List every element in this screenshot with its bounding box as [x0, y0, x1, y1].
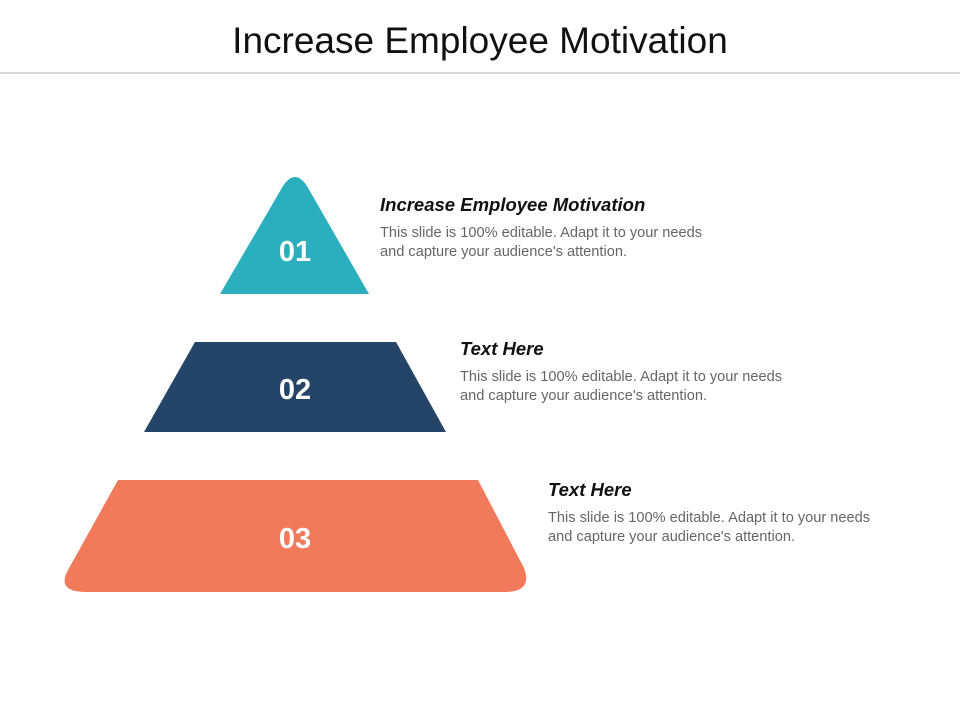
text block 1 — [380, 194, 702, 260]
text block 2: Text Here — [460, 338, 544, 359]
tier 3 trapezoid: 03 — [279, 523, 311, 555]
tier 1 triangle — [220, 177, 369, 294]
text block 3: Text Here — [548, 479, 632, 500]
text block 1: and capture your audience's attention. — [380, 244, 627, 260]
text block 3: and capture your audience's attention. — [548, 528, 795, 544]
text block 2 — [460, 338, 782, 404]
tier 2 trapezoid — [144, 342, 446, 432]
tier 3 trapezoid — [65, 480, 526, 592]
text block 3: This slide is 100% editable. Adapt it to your needs — [548, 510, 870, 526]
text block 1: This slide is 100% editable. Adapt it to your needs — [380, 225, 702, 241]
text block 2: This slide is 100% editable. Adapt it to your needs — [460, 369, 782, 385]
text block 2: and capture your audience's attention. — [460, 388, 707, 404]
tier 2 trapezoid: 02 — [279, 374, 311, 406]
title: Increase Employee Motivation — [232, 20, 728, 61]
text block 3 — [548, 479, 870, 544]
text block 1: Increase Employee Motivation — [380, 194, 645, 215]
tier 1 triangle: 01 — [279, 236, 311, 268]
